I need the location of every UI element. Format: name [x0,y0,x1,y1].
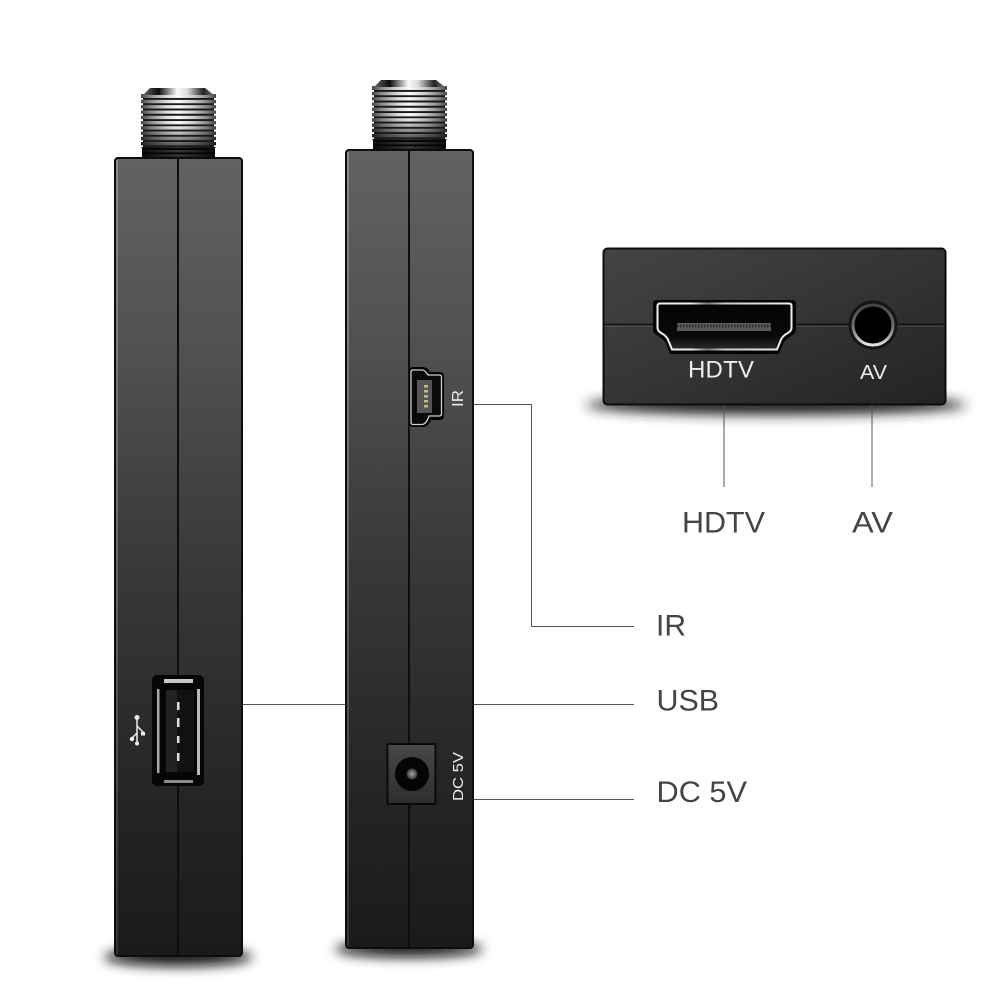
callout label: HDTV: HDTV [682,506,765,540]
HDMI port [653,300,796,354]
shadow: left stick [104,948,252,966]
leader line: IR [474,404,634,626]
connector: right coax thread [372,80,447,150]
stick body [346,150,473,948]
callout label: USB: USB [656,684,719,718]
label on device: IR: IR [450,390,467,407]
leader line: USB [243,704,634,706]
leader line: HDTV [723,405,725,487]
AV jack [848,300,898,350]
DC jack [388,744,436,804]
shadow: right stick [335,941,483,957]
box body [604,248,946,404]
stick body [115,158,242,956]
leader line: AV [871,405,873,487]
label on device: DC 5V: DC 5V [450,752,467,801]
callout label: DC 5V: DC 5V [656,776,747,809]
callout label: IR: IR [656,610,686,642]
connector: left coax thread [141,88,216,158]
panel: HDMI box [604,248,946,404]
callout label: AV: AV [852,506,893,540]
IR port [409,367,444,427]
icon: USB symbol [130,715,145,746]
label on device: HDTV: HDTV [688,356,754,384]
label on device: AV: AV [860,362,888,384]
panel: left stick [115,88,242,956]
USB port [152,675,204,786]
panel: right stick [346,80,473,948]
leader line: DC 5V [474,798,634,800]
shadow: HDMI box [586,395,966,415]
